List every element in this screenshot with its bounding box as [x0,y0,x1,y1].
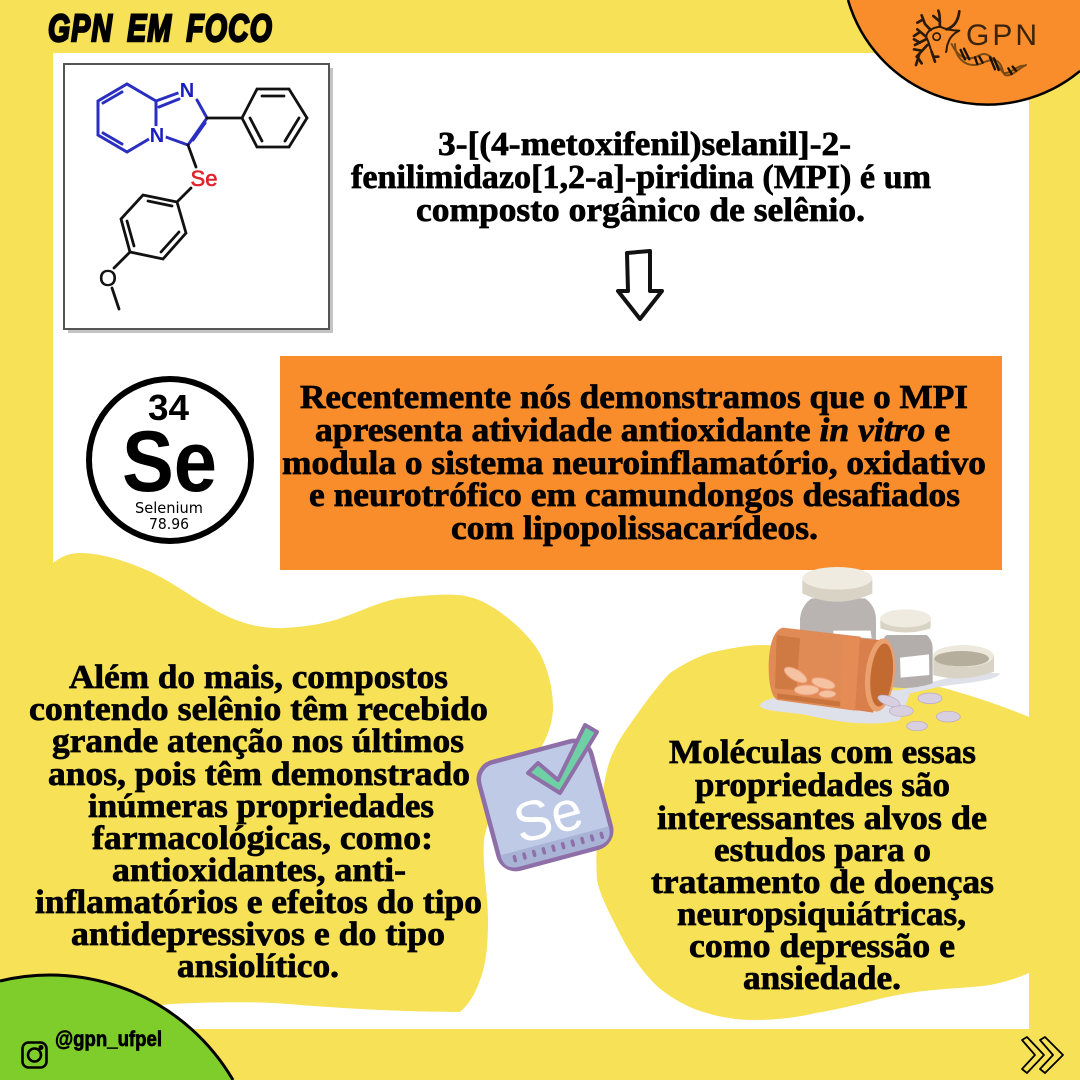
text block: left blob: inflamatórios e efeitos do tipo [35,884,482,921]
icon: selenium periodic element: 78.96 [149,515,189,533]
icon: selenium periodic element: 34 [148,387,189,428]
pills inside [782,664,836,698]
icon: selenium periodic element: Selenium [135,499,203,517]
logo text: GPN [966,19,1037,52]
text block: left blob: inúmeras propriedades [88,788,434,825]
green corner [0,975,233,1080]
arrow: down [618,251,662,319]
icon: selenium periodic element [89,379,251,541]
text block: left blob: ansiolítico. [177,948,339,985]
orange bottle [769,628,898,713]
logo badge: GPN [848,0,1080,105]
text block: right blob [651,734,994,997]
chemical structure figure: MPI: Se [191,166,217,191]
text block: right blob: ansiedade. [743,960,901,997]
icon: double chevron [1022,1037,1063,1073]
chemical structure figure: MPI [64,64,333,333]
illustration: medicine bottles and pills [760,567,1000,731]
large grey bottle [800,567,876,643]
panel: orange highlight [280,356,1002,570]
chemical structure figure: MPI: N [180,80,194,102]
icon: Se checkmark badge [475,725,615,873]
text block: compound description: fenilimidazo[1,2-a]-piridina (MPI) é um [351,159,931,196]
chemical structure figure: MPI: N [150,125,164,147]
text block: right blob: propriedades são [695,767,950,804]
heading: GPN EM FOCO: GPN EM FOCO [48,8,273,50]
text block: left blob: grande atenção nos últimos [52,723,464,760]
text block: left blob: contendo selênio têm recebido [29,691,488,728]
text block: left blob: antidepressivos e do tipo [71,916,445,953]
chemical structure figure: MPI: O [99,265,117,291]
bonds and phenyl rings [112,89,307,309]
icon: selenium periodic element: Se [122,414,217,510]
yellow blob: right [596,645,1029,1020]
icon: instagram [22,1042,46,1068]
text block: left blob: anos, pois têm demonstrado [48,756,470,793]
yellow blob: left [0,553,553,1029]
bottle cap [933,645,994,678]
text block: left blob: antioxidantes, anti- [112,852,406,889]
highlight text: modula o sistema neuroinflamatório, oxidativo [282,445,986,482]
text block: right blob: Moléculas com essas [669,734,976,771]
imidazopyridine core [98,84,207,152]
highlight text: e neurotrófico em camundongos desafiados [309,477,960,514]
loose pills [876,693,960,731]
text block: compound description: 3-[(4-metoxifenil)selanil]-2- [438,126,851,163]
text block: right blob: estudos para o [714,832,931,869]
text block: left blob: farmacológicas, como: [92,820,433,857]
small grey bottle [880,609,933,688]
text block: right blob: neuropsiquiátricas, [677,896,966,933]
text block: right blob: interessantes alvos de [657,800,987,837]
text block: compound description: composto orgânico de selênio. [416,192,865,229]
highlight text: com lipopolissacarídeos. [451,510,818,547]
highlight text: Recentemente nós demonstramos que o MPI [300,379,968,416]
icon: Se checkmark badge: Se [507,777,589,855]
text block: right blob: tratamento de doenças [651,864,994,901]
text block: right blob: como depressão e [689,928,955,965]
highlight text [282,379,986,547]
text block: compound description [351,126,931,229]
highlight text: apresenta atividade antioxidante in vitro e [315,412,950,449]
handle: @gpn_ufpel: @gpn_ufpel [55,1028,162,1051]
text block: left blob [29,659,488,985]
text block: left blob: Além do mais, compostos [69,659,448,696]
table shadow [760,672,1000,724]
icon: neuron and DNA [914,11,1026,75]
